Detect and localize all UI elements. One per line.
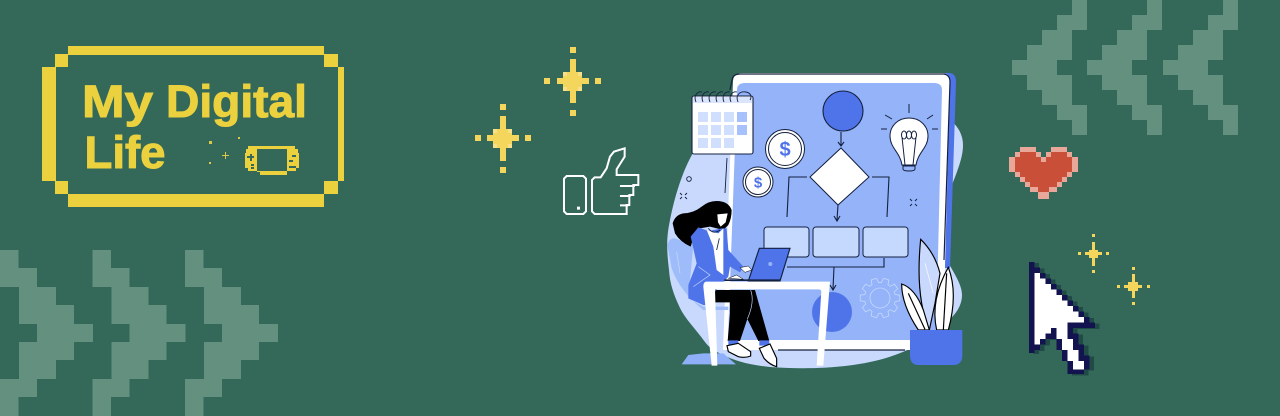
calendar — [692, 92, 753, 154]
hand lower — [728, 275, 743, 279]
coin: small — [743, 167, 773, 197]
process box left — [764, 227, 809, 257]
pixel chevrons: top right — [1012, 0, 1238, 135]
start circle — [823, 91, 863, 131]
pot — [910, 330, 962, 365]
tablet back edge — [900, 73, 956, 268]
leaf right rib — [943, 273, 947, 330]
light bulb — [881, 104, 938, 171]
illustration — [667, 73, 963, 368]
icon: thumbs up — [564, 148, 638, 214]
decision diamond — [810, 148, 869, 205]
gear — [860, 278, 900, 318]
title — [82, 76, 307, 178]
icon: handheld console — [245, 146, 299, 175]
end circle — [812, 292, 852, 332]
laptop — [724, 248, 790, 281]
flowchart — [764, 91, 908, 332]
leaf vein — [925, 263, 933, 293]
title: My — [82, 76, 153, 127]
desk — [703, 282, 830, 366]
hand upper — [740, 266, 752, 272]
sparkle: large top — [544, 47, 601, 116]
background blob — [667, 90, 963, 368]
tablet — [723, 73, 950, 350]
necklace — [708, 228, 720, 250]
woman — [673, 201, 777, 367]
calendar line and marks — [680, 158, 917, 206]
connector lines — [787, 132, 889, 221]
trousers — [715, 290, 769, 341]
shoe left — [727, 343, 751, 357]
pixel chevrons: bottom left — [0, 250, 278, 416]
leaf left rib — [908, 293, 925, 329]
icon: pixel cursor — [1029, 262, 1099, 375]
face — [717, 213, 728, 227]
coin: large — [766, 130, 804, 168]
trouser highlight — [747, 290, 752, 319]
tablet screen — [728, 83, 942, 340]
leaf right — [935, 267, 953, 330]
coin: small: $ — [754, 174, 763, 192]
shoe right — [759, 344, 777, 367]
chair — [667, 238, 736, 364]
tablet outline — [730, 74, 950, 350]
jacket highlight — [693, 267, 710, 287]
merge line — [787, 258, 884, 290]
sparkle: small lower — [1117, 267, 1150, 305]
leaf back — [919, 239, 940, 330]
process box right — [863, 227, 908, 257]
coin: large: $ — [779, 139, 791, 161]
plant — [902, 239, 962, 365]
leaf left — [902, 284, 929, 330]
title: Digital — [166, 76, 307, 127]
cursor shadow — [1033, 263, 1099, 375]
icon: pixel heart — [1009, 147, 1078, 199]
console sparkles — [209, 137, 240, 164]
cursor fill — [1034, 273, 1084, 369]
logo frame — [42, 46, 344, 207]
cursor outline — [1029, 262, 1095, 374]
sparkle: large lower — [475, 104, 531, 173]
process box middle — [813, 227, 859, 257]
title: Life — [84, 127, 166, 178]
jacket — [688, 227, 743, 306]
hair — [673, 201, 732, 247]
shirt — [707, 228, 723, 275]
sparkle: small upper — [1078, 234, 1109, 273]
socks — [728, 340, 769, 346]
